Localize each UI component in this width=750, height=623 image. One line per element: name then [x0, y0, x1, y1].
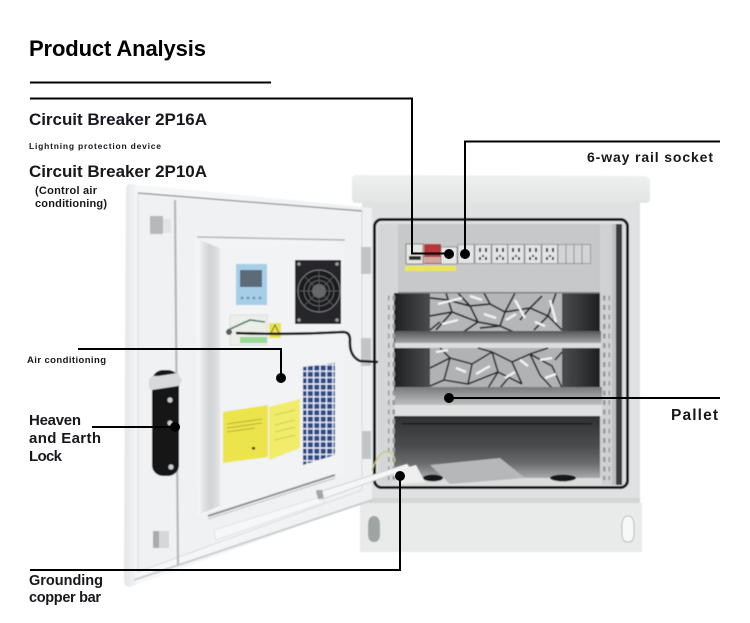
label: heaven and earth lock: Lock: [29, 448, 63, 465]
foil insulation lower: [430, 348, 562, 388]
label: heaven and earth lock: [29, 412, 101, 465]
base plinth: [360, 498, 642, 552]
label: lightning protection device: Lightning protection device: [29, 141, 161, 151]
lower rails: [208, 475, 335, 516]
blank modules: [558, 244, 590, 264]
top rail: [197, 237, 345, 240]
label: 6-way rail socket: 6-way rail socket: [587, 149, 713, 165]
breaker label strip: [405, 266, 456, 271]
warning sticker: [269, 323, 281, 338]
bottom-left bracket: [153, 531, 169, 548]
label: air conditioning: Air conditioning: [27, 355, 106, 366]
bottom bay: [392, 416, 602, 485]
cabinet body: [352, 175, 650, 552]
middle bay: [394, 348, 600, 393]
label: grounding copper bar: Grounding: [29, 573, 103, 589]
label: pallet: Pallet: [671, 407, 718, 424]
rack hole strips: [388, 295, 395, 480]
fan: [295, 260, 341, 324]
label: circuit breaker 16A: Circuit Breaker 2P16A: [29, 110, 207, 129]
door seal: [374, 220, 628, 488]
door lock handle: [149, 370, 182, 476]
controller display: [236, 264, 267, 305]
six-way sockets: [458, 244, 558, 264]
label: control air conditioning note: conditioning): [35, 198, 107, 210]
callout: circuit breakers: [30, 98, 454, 259]
foil insulation upper: [430, 293, 562, 333]
yellow labels: [223, 399, 300, 463]
callout: lock: [92, 422, 180, 432]
rack interior: [378, 224, 624, 485]
unit face: [220, 243, 345, 507]
top-left bracket: [150, 216, 171, 234]
photo: outdoor cabinet with open door: [124, 175, 650, 587]
door outer shell: [124, 184, 372, 587]
locking rod: [175, 200, 178, 565]
callout: 6-way rail socket: [460, 142, 720, 259]
socket pin holes: [479, 248, 554, 260]
unit side: [200, 240, 220, 514]
title: Product Analysis: [29, 36, 206, 61]
divider under title: [30, 82, 271, 84]
circuit breakers: [406, 244, 457, 264]
label: grounding copper bar: [29, 573, 103, 606]
label: circuit breaker 10A: Circuit Breaker 2P10A: [29, 162, 207, 181]
door inner recess: [138, 193, 362, 572]
terminal board: [226, 315, 267, 345]
body shell: [362, 203, 640, 503]
label: heaven and earth lock: and Earth: [29, 430, 101, 447]
upper bay: [394, 293, 600, 345]
air conditioner unit: [195, 236, 345, 540]
top cap: [352, 175, 650, 203]
grounding copper bar: [316, 464, 425, 500]
open door: [124, 184, 425, 587]
rail panel with breakers and sockets: [398, 224, 600, 294]
label: control air conditioning note: (Control air: [35, 185, 98, 197]
cable: [236, 332, 378, 362]
callout: air conditioning: [78, 349, 286, 383]
callout lines and dots: [30, 82, 720, 570]
earth wire: [372, 451, 395, 470]
label: control air conditioning note: [35, 185, 107, 210]
label: heaven and earth lock: Heaven: [29, 412, 81, 429]
label: grounding copper bar: copper bar: [29, 590, 101, 606]
upper shelf: [395, 331, 601, 348]
condenser grille: [303, 363, 335, 465]
callout: grounding copper bar: [30, 471, 405, 570]
recess behind unit: [195, 236, 345, 516]
lower shelf: [394, 387, 602, 416]
door hinges: [361, 247, 371, 459]
callout: pallet: [444, 393, 720, 403]
